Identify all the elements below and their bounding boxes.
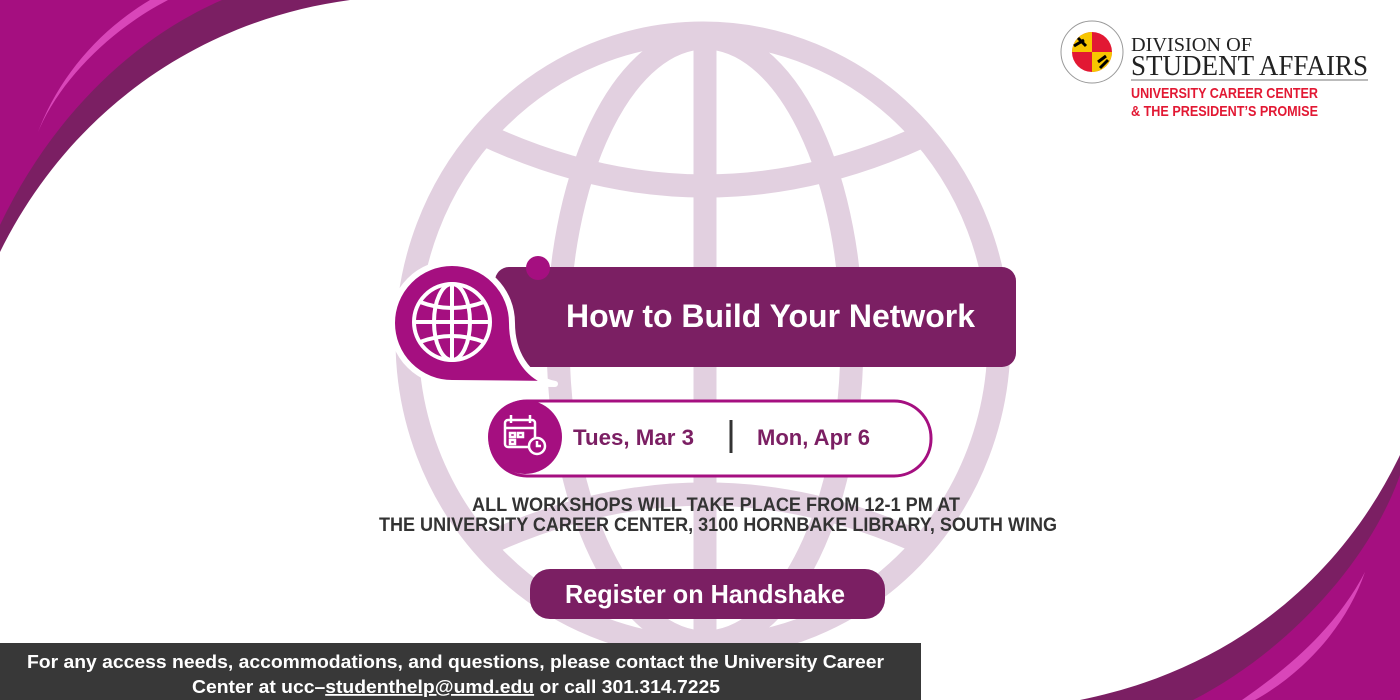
logo: DIVISION OF (1131, 34, 1252, 56)
location text (379, 495, 1057, 536)
location text: ALL WORKSHOPS WILL TAKE PLACE FROM 12-1 PM AT (472, 495, 960, 516)
icon bubble: globe (392, 263, 555, 384)
logo: UNIVERSITY CAREER CENTER (1131, 85, 1318, 102)
register button (530, 569, 885, 619)
register button: Register on Handshake (565, 579, 845, 609)
decoration: top-left swoosh (0, 0, 350, 252)
footer bar: Center at ucc– studenthelp@umd.edu or call 301.314.7225 (192, 677, 720, 697)
icon: calendar (488, 400, 562, 474)
logo: STUDENT AFFAIRS (1131, 50, 1368, 82)
date pill: Mon, Apr 6 (757, 425, 870, 450)
logo (1061, 21, 1368, 120)
title banner: How to Build Your Network (566, 298, 975, 334)
date pill: Tues, Mar 3 (573, 425, 694, 450)
title banner (392, 256, 1016, 384)
logo: & THE PRESIDENT’S PROMISE (1131, 103, 1318, 120)
location text: THE UNIVERSITY CAREER CENTER, 3100 HORNBAKE LIBRARY, SOUTH WING (379, 515, 1057, 536)
footer bar: For any access needs, accommodations, and questions, please contact the University Career (27, 652, 884, 672)
footer bar (0, 643, 921, 700)
decoration: bottom-right swoosh (1080, 455, 1400, 700)
date pill (488, 400, 931, 476)
background globe (390, 20, 1010, 660)
